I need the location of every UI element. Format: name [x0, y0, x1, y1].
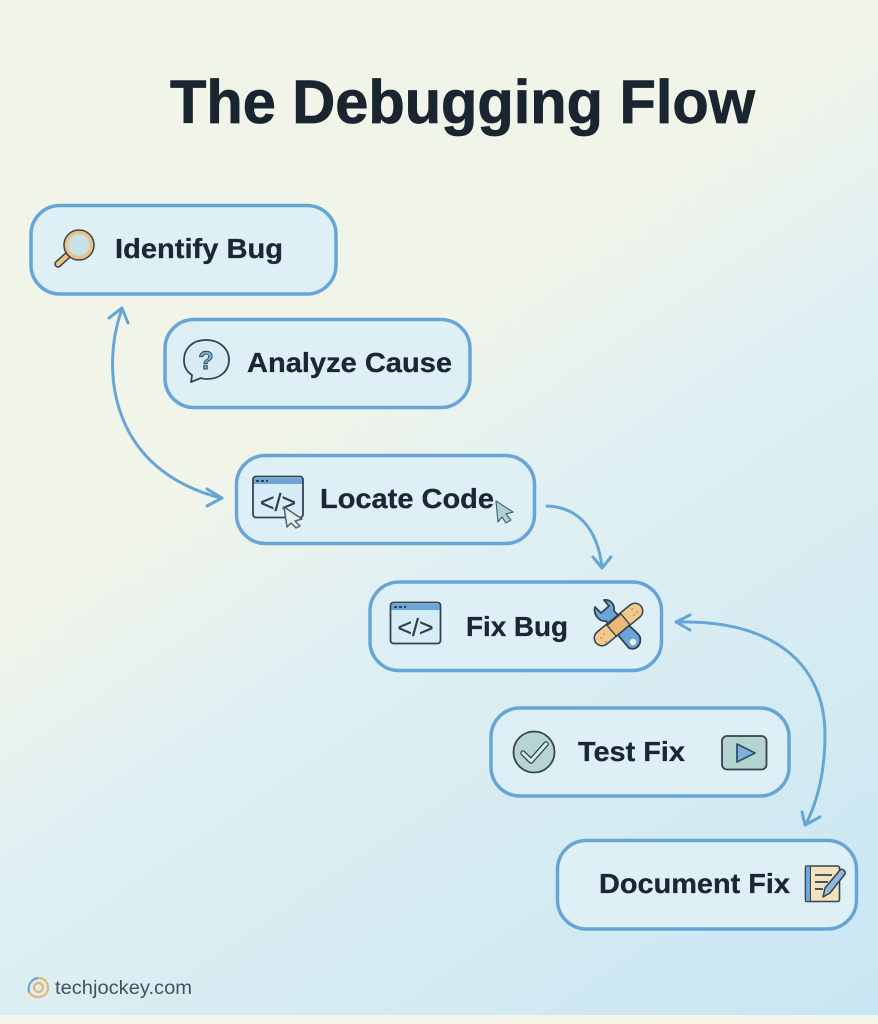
- step: locate code: [236, 456, 534, 544]
- icon: code window: </>: [397, 614, 434, 642]
- icon: speech bubble with question mark: [184, 340, 229, 382]
- icon: play button: [722, 736, 766, 770]
- step: identify bug: [31, 206, 336, 294]
- title: The Debugging Flow: [170, 68, 756, 136]
- label: fix bug: Fix Bug: [466, 611, 568, 642]
- arrow: fix bug to document fix, double-headed: [676, 615, 825, 825]
- icon: check circle: [514, 732, 554, 772]
- icon: notebook and pen: [806, 866, 845, 902]
- label: locate code: Locate Code: [320, 483, 494, 514]
- arrow: locate code to identify bug, double-headed: [109, 308, 222, 506]
- icon: code window with cursor: [253, 476, 303, 528]
- arrow: locate code to fix bug: [547, 506, 611, 568]
- step: document fix: [558, 840, 856, 929]
- icon: cursor: [496, 501, 513, 523]
- step: analyze cause: [165, 320, 470, 408]
- label: test fix: Test Fix: [578, 736, 685, 767]
- label: identify bug: Identify Bug: [115, 233, 283, 264]
- label: document fix: Document Fix: [599, 868, 790, 899]
- icon: techjockey logo: [29, 978, 48, 997]
- footer text: techjockey.com: [55, 978, 192, 999]
- footer logo: techjockey.com: [29, 978, 192, 999]
- label: analyze cause: Analyze Cause: [247, 347, 452, 378]
- icon: speech bubble with question mark: ?: [198, 347, 214, 375]
- icon: wrench and bandage: [595, 600, 640, 649]
- step: fix bug: [370, 582, 662, 670]
- icon: magnifying glass: [58, 230, 94, 264]
- icon: code window: [390, 602, 440, 644]
- step: test fix: [491, 708, 789, 796]
- icon: code window with cursor: </>: [260, 489, 296, 517]
